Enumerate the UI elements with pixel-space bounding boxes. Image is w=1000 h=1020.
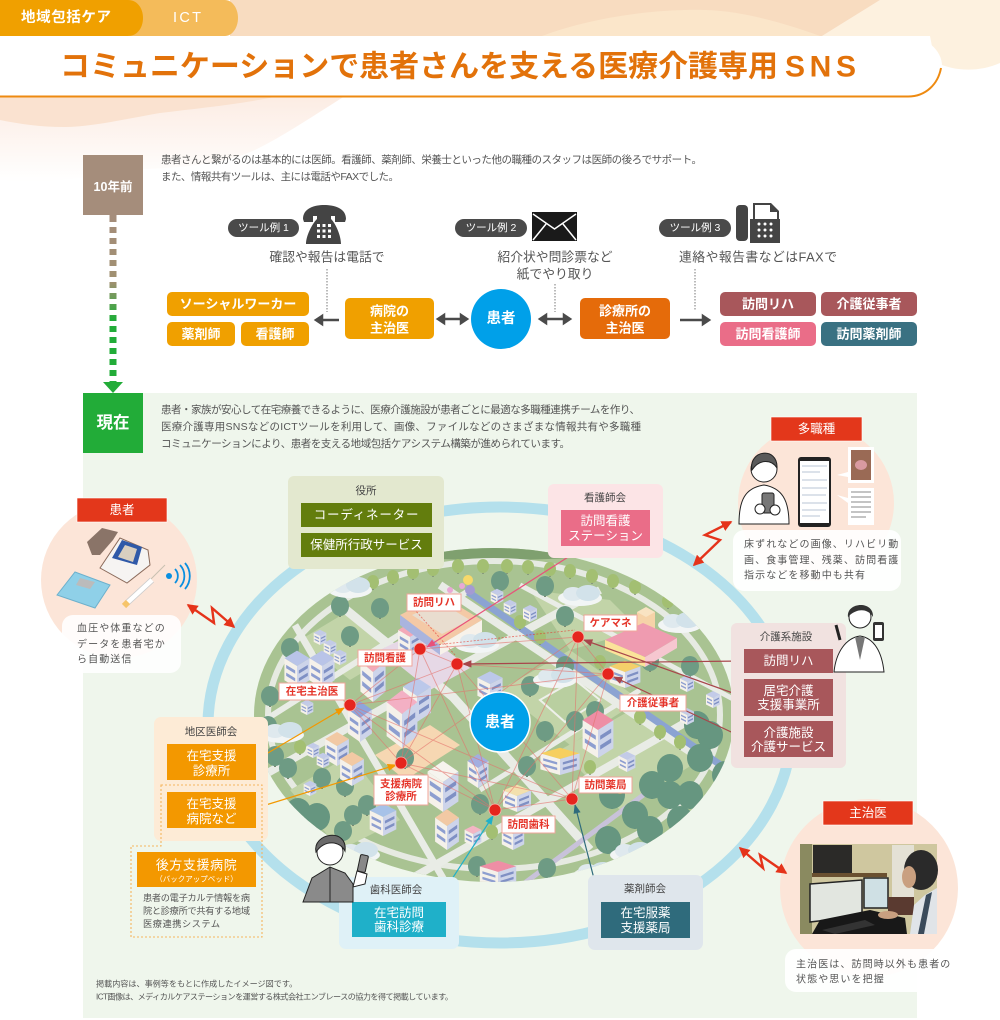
callout: attending doctor <box>780 799 965 992</box>
home pharmacist box <box>821 322 917 346</box>
arrow left <box>316 316 339 324</box>
footnote: 掲載内容は、事例等をもとに作成したイメージ図です。 <box>96 978 297 988</box>
label: home doctor: 在宅主治医 <box>286 684 339 698</box>
hospital doctor box: 主治医 <box>370 320 409 336</box>
callout: patient <box>41 498 197 673</box>
category tabs: 地域包括ケア <box>21 8 111 26</box>
icon: envelope <box>532 212 577 241</box>
past description <box>161 153 702 183</box>
label: support hospital clinic: 支援病院 <box>380 777 422 790</box>
hospital doctor box <box>345 298 434 339</box>
panel: backup hospital: （バックアップベッド） <box>155 874 238 884</box>
outer ring <box>208 507 792 943</box>
icon: man with phone <box>303 835 369 902</box>
panel: district medical association: 在宅支援 <box>186 749 237 763</box>
railway <box>524 793 645 881</box>
icon: fax <box>736 203 780 243</box>
callout: multi-profession: 多職種 <box>798 422 836 436</box>
present description <box>161 403 642 450</box>
callout: attending doctor: 主治医は、訪問時以外も患者の <box>796 958 951 970</box>
category tabs <box>0 0 238 36</box>
timeline arrow <box>103 215 123 393</box>
callout: multi-profession <box>733 417 901 591</box>
tool 2: mail <box>455 212 577 241</box>
panel: backup hospital: 院と診療所で共有する地域 <box>143 905 250 916</box>
title bar: SNS <box>785 50 856 84</box>
callout: patient: データを患者宅か <box>77 638 166 650</box>
lightning arrow: attending doctor <box>740 848 786 873</box>
double arrow right <box>540 315 570 323</box>
lightning arrow: multi-profession <box>694 522 731 565</box>
callout: patient: 患者 <box>109 503 135 517</box>
map labels <box>279 594 686 833</box>
panel: nursing association: 訪問看護 <box>580 513 631 528</box>
label: home nursing <box>358 650 412 666</box>
tool 1: phone: ツール例 1 <box>238 221 289 234</box>
clinic doctor box: 診療所の <box>599 304 651 318</box>
trees <box>259 559 738 879</box>
category tabs: ICT <box>173 10 201 26</box>
hospital doctor box: 病院の <box>370 304 409 318</box>
10 years ago badge: 10年前 <box>94 179 132 194</box>
patient circle: 患者 <box>486 309 516 327</box>
double arrow left <box>438 315 467 323</box>
10 years ago badge <box>83 155 143 215</box>
pharmacist box <box>167 322 235 346</box>
clinic doctor box <box>580 298 670 339</box>
past description: 患者さんと繋がるのは基本的には医師。看護師、薬剤師、栄養士といった他の職種のスタッフは医師の後ろでサポート。 <box>161 153 702 166</box>
lightning arrow: patient <box>188 605 234 627</box>
label: care worker <box>620 695 686 711</box>
social worker box <box>167 292 309 316</box>
panel: district medical association: 病院など <box>186 812 237 826</box>
home rehab box: 訪問リハ <box>742 296 794 312</box>
care worker box <box>821 292 917 316</box>
social worker box: ソーシャルワーカー <box>180 296 296 312</box>
label: care manager <box>584 615 637 631</box>
patient circle <box>471 289 531 349</box>
photo: doctor at monitors <box>800 844 938 934</box>
document thumbnail <box>848 488 874 525</box>
map nodes <box>344 631 614 816</box>
past description: また、情報共有ツールは、主には電話やFAXでした。 <box>161 170 399 183</box>
panel: district medical association: 地区医師会 <box>185 725 238 738</box>
care facility <box>637 612 655 630</box>
home nurse box <box>720 322 816 346</box>
plaza <box>540 680 600 722</box>
tool 2 caption <box>497 250 613 282</box>
panel: city hall: 保健所行政サービス <box>310 538 423 552</box>
icon: doctor with phone <box>834 605 884 672</box>
panel: nursing association <box>548 484 663 558</box>
label: home doctor <box>279 683 345 700</box>
label: care manager: ケアマネ <box>590 617 632 629</box>
panel: backup hospital: 医療連携システム <box>143 918 221 929</box>
present badge <box>83 393 143 453</box>
tool 2: mail: ツール例 2 <box>466 221 517 234</box>
callout: multi-profession: 床ずれなどの画像、リハビリ動 <box>744 538 899 550</box>
label: support hospital clinic <box>374 775 428 805</box>
pharmacist box: 薬剤師 <box>181 326 221 342</box>
panel: care facilities: 支援事業所 <box>757 697 820 712</box>
panel: backup hospital: 患者の電子カルテ情報を病 <box>143 892 250 903</box>
label: support hospital clinic: 診療所 <box>385 790 417 802</box>
present description: 患者・家族が安心して在宅療養できるように、医療介護施設が患者ごとに最適な多職種連携チームを作り、 <box>161 403 640 416</box>
label: home pharmacy: 訪問薬局 <box>584 778 626 791</box>
panel: district medical association: 診療所 <box>193 763 231 778</box>
panel: pharmacist association: 在宅服薬 <box>620 906 671 920</box>
label: care worker: 介護従事者 <box>627 696 679 709</box>
title bar <box>0 36 942 97</box>
arrow right <box>680 316 709 324</box>
tool 3: fax <box>659 203 780 243</box>
home rehab box <box>720 292 816 316</box>
callout: patient: 血圧や体重などの <box>77 622 166 634</box>
balloons <box>447 575 475 595</box>
panel: care facilities: 介護施設 <box>763 725 814 740</box>
present description: 医療介護専用SNSなどのICTツールを利用して、画像、ファイルなどのさまざまな情報共有や多職種 <box>161 420 642 433</box>
icon: person using smartphone <box>739 453 789 524</box>
icon: blood pressure devices <box>57 528 190 608</box>
present description: コミュニケーションにより、患者を支える地域包括ケアシステム構築が進められています。 <box>161 437 570 450</box>
panel: city hall: 役所 <box>356 484 377 497</box>
connector arrows <box>256 545 744 902</box>
panel: district medical association: 在宅支援 <box>186 797 237 811</box>
panel: care facilities: 介護サービス <box>751 739 826 754</box>
label: home dentistry: 訪問歯科 <box>508 818 550 830</box>
nurse box: 看護師 <box>255 326 295 342</box>
canal <box>468 592 728 770</box>
label: home dentistry <box>502 816 555 833</box>
tool 2 caption: 紹介状や問診票など <box>497 250 613 264</box>
tool 3: fax: ツール例 3 <box>670 221 721 234</box>
large facility <box>400 608 482 645</box>
background wave shapes <box>0 0 1000 182</box>
tool 2 caption: 紙でやり取り <box>517 266 593 282</box>
panel: pharmacist association <box>588 875 703 950</box>
callout: patient: ら自動送信 <box>77 652 132 666</box>
tool 1: phone <box>228 205 346 244</box>
panel: dental association <box>339 877 459 949</box>
tool 1 caption: 確認や報告は電話で <box>269 250 385 264</box>
panel: care facilities: 訪問リハ <box>763 653 814 668</box>
panel: backup hospital <box>131 785 262 937</box>
panel: city hall <box>288 476 444 569</box>
title bar: コミュニケーションで患者さんを支える医療介護専用 <box>60 50 778 84</box>
panel: dental association: 歯科医師会 <box>370 883 423 896</box>
panel: nursing association: 看護師会 <box>584 491 626 504</box>
callout: multi-profession: 指示などを移動中も共有 <box>744 568 866 582</box>
wound photo <box>848 447 874 483</box>
dotted leader lines <box>327 269 695 312</box>
buildings <box>284 589 720 888</box>
network lines <box>350 610 608 810</box>
icon: telephone <box>303 205 346 244</box>
past flow diagram <box>167 289 917 349</box>
label: home nursing: 訪問看護 <box>364 651 406 664</box>
map patient circle <box>470 692 530 752</box>
roads <box>255 585 740 885</box>
callout: attending doctor: 状態や思いを把握 <box>796 972 885 986</box>
panel: dental association: 在宅訪問 <box>374 905 424 920</box>
panel: care facilities: 介護系施設 <box>760 630 813 643</box>
home nurse box: 訪問看護師 <box>735 326 801 342</box>
clinic doctor box: 主治医 <box>605 320 645 336</box>
panel: care facilities: 居宅介護 <box>763 683 814 698</box>
panel: district medical association <box>154 717 268 841</box>
panel: city hall: コーディネーター <box>314 507 419 522</box>
panel: present <box>83 393 917 1018</box>
panel: backup hospital: 後方支援病院 <box>156 858 237 872</box>
callout: multi-profession: 画、食事管理、残薬、訪問看護 <box>744 554 899 566</box>
care worker box: 介護従事者 <box>836 296 902 312</box>
panel: care facilities <box>731 623 846 768</box>
home pharmacist box: 訪問薬剤師 <box>836 326 902 342</box>
clouds <box>260 577 702 883</box>
panel: dental association: 歯科診療 <box>374 919 424 934</box>
footnote <box>96 978 453 1002</box>
panel: nursing association: ステーション <box>568 529 643 543</box>
label: home rehab <box>407 594 461 611</box>
present badge: 現在 <box>96 413 130 432</box>
label: home pharmacy <box>579 777 632 793</box>
callout: attending doctor: 主治医 <box>849 806 887 820</box>
label: home rehab: 訪問リハ <box>413 596 455 608</box>
city map illustration <box>254 548 731 882</box>
footnote: ICT画像は、メディカルケアステーションを運営する株式会社エンブレースの協力を得て掲載しています。 <box>96 992 453 1002</box>
lighter lawn patches <box>290 590 700 850</box>
panel: pharmacist association: 薬剤師会 <box>624 882 666 895</box>
smartphone screenshot <box>798 457 831 527</box>
nurse box <box>241 322 309 346</box>
panel: pharmacist association: 支援薬局 <box>620 921 671 935</box>
map patient circle: 患者 <box>485 712 515 730</box>
tool 3 caption: 連絡や報告書などはFAXで <box>679 250 837 264</box>
